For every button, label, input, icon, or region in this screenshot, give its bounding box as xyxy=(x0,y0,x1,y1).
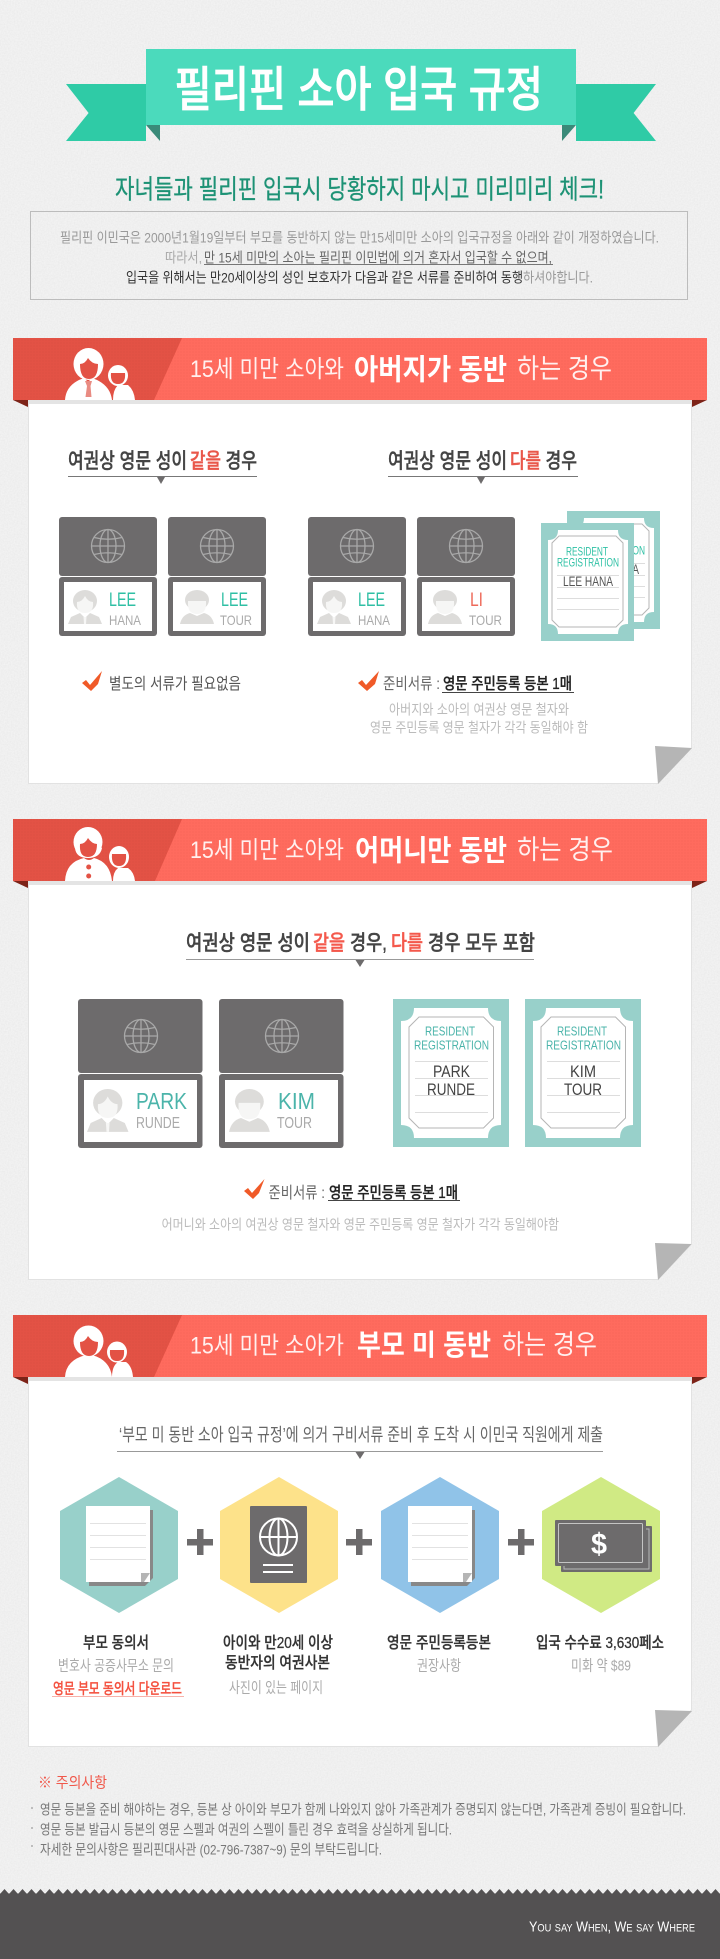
item: passport copy xyxy=(220,1477,338,1697)
cautions heading: ※ 주의사항 xyxy=(38,1774,107,1792)
heading: both cases: 여권상 영문 성이 xyxy=(186,932,310,955)
passport: KIM TOUR: KIM xyxy=(278,1088,315,1114)
label xyxy=(536,1634,664,1675)
item: resident registration xyxy=(381,1477,499,1675)
plus xyxy=(346,1529,372,1555)
note: spelling match: 아버지와 소아의 여권상 영문 철자와 xyxy=(389,701,569,717)
heading: both cases: 경우 모두 포함 xyxy=(428,932,535,955)
caution lines: 영문 등본 발급시 등본의 영문 스펠과 여권의 스펠이 틀린 경우 효력을 상실하게 됩니다. xyxy=(40,1821,452,1837)
note: required document xyxy=(268,1184,460,1202)
icon: mother and child xyxy=(65,827,135,881)
icon: parents and child xyxy=(65,1326,133,1377)
note: required document: 영문 주민등록 등본 1매 xyxy=(329,1184,458,1202)
passport: LEE HANA: LEE xyxy=(109,589,136,611)
passport: PARK RUNDE xyxy=(78,999,202,1148)
document: resident registration back copy xyxy=(567,511,660,629)
item: parental consent xyxy=(52,1477,184,1698)
icon: father and child xyxy=(65,348,135,400)
heading: unaccompanied rule xyxy=(117,1425,603,1459)
note: required document xyxy=(383,675,574,693)
header text: 15세 미만 소아와 xyxy=(190,837,344,864)
label: 부모 동의서 xyxy=(83,1634,149,1652)
header band xyxy=(13,1315,707,1377)
heading: different surname: 경우 xyxy=(546,450,577,473)
card xyxy=(13,400,707,784)
label: 영문 부모 동의서 다운로드 xyxy=(53,1681,182,1698)
panel: mother accompanying xyxy=(13,819,707,1280)
card xyxy=(13,1377,707,1746)
note: no documents needed: 별도의 서류가 필요없음 xyxy=(109,675,241,693)
intro line 2: 따라서, xyxy=(165,249,202,265)
document: resident registration back copy: LEE HANA xyxy=(589,561,639,577)
passport: LEE TOUR xyxy=(168,517,266,636)
panel: father accompanying xyxy=(13,338,707,784)
note: spelling match: 어머니와 소아의 여권상 영문 철자와 영문 주민등록 영문 철자가 각각 동일해야함 xyxy=(162,1216,559,1232)
label: 미화 약 $89 xyxy=(571,1658,631,1675)
label: 영문 주민등록등본 xyxy=(387,1634,491,1652)
document: resident registration back copy: REGISTRATION xyxy=(583,543,645,557)
document: resident registration front copy: REGISTRATION xyxy=(557,555,619,569)
cautions xyxy=(31,1774,686,1857)
plus xyxy=(508,1529,534,1555)
icon: banknotes xyxy=(555,1520,652,1572)
intro line 3: 입국을 위해서는 만20세이상의 성인 보호자가 다음과 같은 서류를 준비하여 동행 xyxy=(126,269,523,285)
header band xyxy=(13,338,707,400)
label xyxy=(387,1634,491,1675)
intro line 2: 만 15세 미만의 소아는 필리핀 이민법에 의거 혼자서 입국할 수 없으며, xyxy=(204,249,552,265)
heading: both cases: 같을 xyxy=(313,932,345,955)
header text: 15세 미만 소아가 xyxy=(190,1332,344,1360)
document: resident registration front copy: LEE HANA xyxy=(563,573,613,589)
hexagon xyxy=(381,1477,499,1613)
header text: 부모 미 동반 xyxy=(357,1329,491,1362)
document: resident registration front copy: RESIDENT xyxy=(566,544,608,558)
card xyxy=(13,881,707,1280)
header text xyxy=(190,1329,597,1362)
passport: PARK RUNDE: RUNDE xyxy=(136,1115,180,1132)
header text xyxy=(190,354,612,386)
header text: 15세 미만 소아와 xyxy=(190,356,344,383)
header text: 하는 경우 xyxy=(502,1330,597,1360)
document: resident registration back copy: RESIDENT xyxy=(592,532,634,546)
icon: banknotes: $ xyxy=(591,1528,607,1561)
heading: different surname: 여권상 영문 성이 xyxy=(388,450,507,473)
document: PARK RUNDE registration: RESIDENT xyxy=(425,1024,475,1039)
plus xyxy=(187,1529,213,1555)
hexagon xyxy=(542,1477,660,1613)
heading: same surname: 같을 xyxy=(190,450,221,473)
heading: both cases: 경우, xyxy=(350,932,387,955)
header band xyxy=(13,819,707,881)
note: required document: 영문 주민등록 등본 1매 xyxy=(443,675,572,693)
header text: 아버지가 동반 xyxy=(354,354,507,386)
document: KIM TOUR registration xyxy=(525,999,641,1147)
panel: unaccompanied xyxy=(13,1315,707,1747)
header text: 하는 경우 xyxy=(517,835,613,865)
note: required document: 준비서류 : xyxy=(268,1184,325,1202)
title: 필리핀 소아 입국 규정 xyxy=(174,64,543,117)
note: spelling match: 영문 주민등록 영문 철자가 각각 동일해야 함 xyxy=(370,719,588,735)
passport: PARK RUNDE: PARK xyxy=(136,1088,188,1114)
item: entry fee xyxy=(536,1477,664,1675)
passport: LI TOUR: LI xyxy=(470,589,483,611)
icon: document xyxy=(86,1506,153,1586)
hexagon xyxy=(60,1477,178,1613)
passport: LEE HANA: HANA xyxy=(109,612,142,628)
heading: different surname xyxy=(388,450,578,484)
label: 입국 수수료 3,630페소 xyxy=(536,1634,664,1652)
header text xyxy=(190,834,613,868)
page curl xyxy=(655,746,692,784)
heading: both cases xyxy=(186,932,535,967)
icon: check xyxy=(244,1179,264,1199)
document: resident registration front copy xyxy=(541,523,634,641)
label: 권장사항 xyxy=(417,1658,461,1675)
label xyxy=(223,1634,333,1697)
label: 사진이 있는 페이지 xyxy=(229,1680,323,1697)
icon: document xyxy=(408,1506,475,1586)
document: PARK RUNDE registration xyxy=(393,999,509,1147)
passport: KIM TOUR: TOUR xyxy=(277,1115,312,1132)
label: 아이와 만20세 이상 xyxy=(223,1634,333,1652)
document: KIM TOUR registration: KIM xyxy=(570,1062,596,1081)
caution lines: 자세한 문의사항은 필리핀대사관 (02-796-7387~9) 문의 부탁드립니다. xyxy=(40,1841,382,1857)
document: PARK RUNDE registration: REGISTRATION xyxy=(414,1038,489,1053)
passport: LI TOUR xyxy=(417,517,515,636)
heading: both cases: 다를 xyxy=(391,932,423,955)
label: 동반자의 여권사본 xyxy=(225,1654,330,1672)
label: 변호사 공증사무소 문의 xyxy=(58,1658,174,1675)
document: KIM TOUR registration: TOUR xyxy=(564,1080,602,1099)
passport: LI TOUR: TOUR xyxy=(469,612,502,628)
icon: passport xyxy=(250,1506,307,1583)
passport: LEE HANA xyxy=(59,517,157,636)
icon: check left xyxy=(82,671,102,691)
passport: LEE HANA second case xyxy=(308,517,406,636)
header text: 하는 경우 xyxy=(517,354,612,384)
document: PARK RUNDE registration: PARK xyxy=(433,1062,471,1081)
page curl xyxy=(655,1243,692,1280)
intro box xyxy=(30,212,688,300)
passport: LEE TOUR: TOUR xyxy=(220,612,252,628)
icon: check right xyxy=(358,671,379,691)
document: PARK RUNDE registration: RUNDE xyxy=(427,1080,475,1099)
passport: KIM TOUR xyxy=(219,999,344,1148)
heading: same surname xyxy=(68,450,257,484)
label xyxy=(52,1634,184,1698)
passport: LEE HANA second case: LEE xyxy=(358,589,385,611)
document: KIM TOUR registration: RESIDENT xyxy=(557,1024,607,1039)
title ribbon xyxy=(66,49,656,141)
footer xyxy=(0,1889,720,1959)
subtitle: 자녀들과 필리핀 입국시 당황하지 마시고 미리미리 체크! xyxy=(115,174,604,204)
note: spelling match xyxy=(370,701,588,735)
heading: same surname: 경우 xyxy=(226,450,257,473)
passport: LEE HANA second case: HANA xyxy=(358,612,391,628)
page curl xyxy=(655,1710,692,1747)
note: required document: 준비서류 : xyxy=(383,675,440,693)
heading: different surname: 다를 xyxy=(510,450,541,473)
header text: 어머니만 동반 xyxy=(355,834,507,868)
heading: same surname: 여권상 영문 성이 xyxy=(68,450,187,473)
passport: LEE TOUR: LEE xyxy=(221,589,248,611)
hexagon xyxy=(220,1477,338,1613)
intro line 3: 하셔야합니다. xyxy=(523,269,593,285)
caution lines xyxy=(31,1801,686,1857)
document: KIM TOUR registration: REGISTRATION xyxy=(546,1038,621,1053)
